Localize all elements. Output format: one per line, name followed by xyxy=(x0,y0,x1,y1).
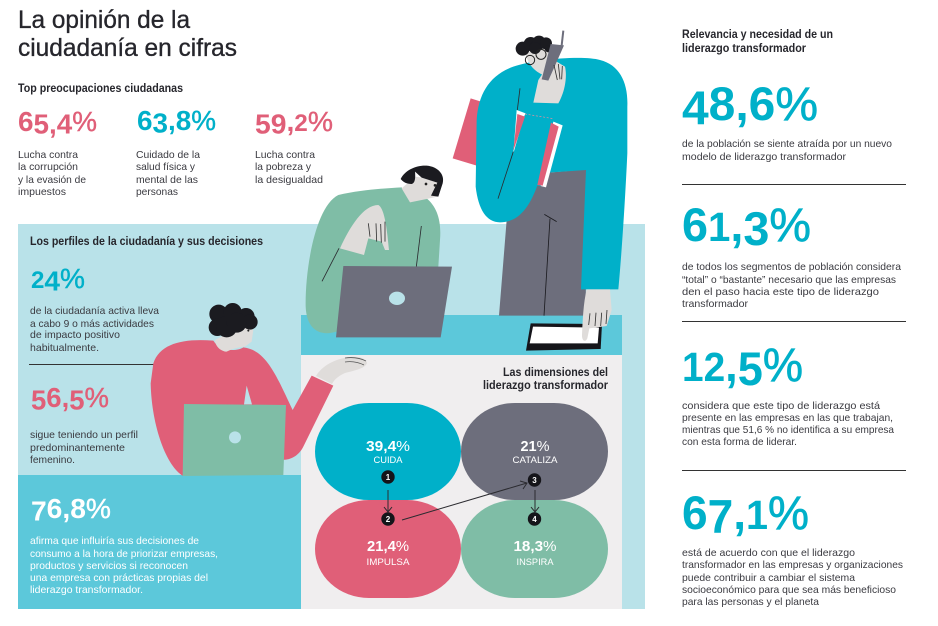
stat: 12,5%: % xyxy=(763,338,803,391)
stat: 24%: de impacto positivo xyxy=(30,329,120,341)
stat: 76,8%: 6,8 xyxy=(47,493,86,524)
stat: 61,3%: transformador xyxy=(682,298,749,310)
stat: 67,1%: está de acuerdo con que el liderazgo xyxy=(682,547,855,559)
stat: 63,8%: % xyxy=(191,105,216,136)
stat: 61,3%: % xyxy=(769,198,811,251)
stat: 65,4%: 6 xyxy=(18,106,34,137)
heading: las dimensiones: liderazgo transformador xyxy=(483,378,608,392)
stat: 76,8%: 7 xyxy=(31,496,47,526)
label: inspira xyxy=(514,538,556,568)
stat: 67,1%: para las personas y el planeta xyxy=(682,596,819,608)
stat: 59,2%: 59 xyxy=(255,108,286,140)
heading: perfiles: Los perfiles de la ciudadanía y sus decisiones xyxy=(30,236,263,248)
stat: 48,6% xyxy=(682,77,892,163)
marker: 1 xyxy=(381,470,395,484)
blob: inspira xyxy=(461,500,608,598)
stat: 48,6%: 4 xyxy=(682,81,709,134)
stat: 76,8% xyxy=(30,493,218,596)
stat: 67,1%: 6 xyxy=(682,486,708,539)
stat: 67,1%: , xyxy=(733,486,746,539)
stat: 63,8% xyxy=(136,105,216,198)
stat: 63,8%: ,8 xyxy=(168,105,191,136)
stat: 76,8%: afirma que influiría sus decisiones de xyxy=(30,535,199,547)
title: La opinión de la xyxy=(18,6,190,34)
stat: 65,4% xyxy=(18,106,97,198)
title xyxy=(18,6,237,62)
stat: 65,4%: impuestos xyxy=(18,186,66,198)
blob: cataliza xyxy=(461,403,608,500)
stat: 56,5%: femenino. xyxy=(30,454,75,466)
heading: las dimensiones: Las dimensiones del xyxy=(503,365,608,379)
stat: 24%: % xyxy=(60,263,85,294)
title: ciudadanía en cifras xyxy=(18,34,237,62)
stat: 59,2%: la desigualdad xyxy=(255,174,323,186)
stat: 56,5%: % xyxy=(85,382,109,413)
stat: 12,5%: considera que este tipo de liderazgo está xyxy=(682,400,880,412)
label: inspira: 18,3% xyxy=(514,538,556,555)
stat: 24%: a cabo 9 o más actividades xyxy=(30,318,154,330)
marker: 3: 3 xyxy=(532,476,537,485)
stat: 24%: habitualmente. xyxy=(30,342,99,354)
stat: 48,6%: modelo de liderazgo transformador xyxy=(682,151,847,163)
stat: 24% xyxy=(30,263,159,354)
label: cataliza: CATALIZA xyxy=(512,455,558,466)
section: los perfiles de la ciudadanía xyxy=(29,236,263,466)
stat: 59,2%: la pobreza y xyxy=(255,161,312,173)
heading: top preocupaciones: Top preocupaciones ciudadanas xyxy=(18,83,183,95)
stat: 76,8%: liderazgo transformador. xyxy=(30,584,143,596)
stat: 24%: 2 xyxy=(31,267,44,294)
heading: relevancia xyxy=(682,29,833,55)
stat: 61,3%: 61, xyxy=(682,198,743,251)
marker: 2 xyxy=(381,512,395,526)
label: cataliza: 21% xyxy=(520,438,550,455)
stat: 56,5%: 5 xyxy=(69,384,85,416)
stat: 59,2%: 2% xyxy=(294,106,333,137)
stat: 24%: 4 xyxy=(44,266,60,296)
arrow: 3 to 4 xyxy=(531,490,539,512)
stat: 12,5%: mientras que 51,6 % no identifica a su empresa xyxy=(682,424,894,436)
stat: 67,1%: 1% xyxy=(746,486,810,539)
stat: 12,5% xyxy=(682,338,894,448)
stat: 61,3%: 3 xyxy=(743,202,769,255)
label: impulsa xyxy=(366,538,410,568)
stat: 65,4%: Lucha contra xyxy=(18,149,78,161)
heading: relevancia: liderazgo transformador xyxy=(682,43,806,55)
stat: 61,3% xyxy=(682,198,901,310)
label: cataliza xyxy=(512,438,558,466)
marker: 4: 4 xyxy=(532,515,537,524)
stat: 67,1%: transformador en las empresas y organizaciones xyxy=(682,559,903,571)
stat: 48,6%: % xyxy=(775,77,818,130)
arrow: 2 to 3 xyxy=(402,481,527,520)
marker: 1: 1 xyxy=(386,473,391,482)
illustration: woman in pink with laptop xyxy=(151,303,367,476)
stat: 76,8%: % xyxy=(86,493,111,524)
heading: relevancia: Relevancia y necesidad de un xyxy=(682,29,833,41)
stat: 12,5%: presente en las empresas en las que trabajan, xyxy=(682,412,893,424)
stat: 76,8%: una empresa con prácticas propias del xyxy=(30,572,208,584)
stat: 56,5%: 6, xyxy=(46,382,69,413)
stat: 63,8%: 3 xyxy=(152,108,168,138)
stat: 56,5%: sigue teniendo un perfil xyxy=(30,429,138,441)
stat: 63,8%: Cuidado de la xyxy=(136,149,200,161)
stat: 56,5%: predominantemente xyxy=(30,442,125,454)
stat: 67,1% xyxy=(682,486,903,608)
illustration: man on the phone xyxy=(453,31,627,351)
stat: 56,5% xyxy=(30,382,138,466)
stat: 61,3%: de todos los segmentos de población considera xyxy=(682,261,901,273)
stat: 65,4%: la corrupción xyxy=(18,161,78,173)
panel: teal desk xyxy=(301,315,622,355)
illustration: woman with laptop xyxy=(306,166,452,337)
marker: 2: 2 xyxy=(386,515,391,524)
label: cuida: 39,4% xyxy=(366,438,410,455)
stat: 59,2%: , xyxy=(286,106,294,137)
label: impulsa: IMPULSA xyxy=(366,557,410,568)
label: inspira: INSPIRA xyxy=(516,557,554,568)
label: cuida: CUIDA xyxy=(374,455,403,466)
chart: dimensions diagram xyxy=(315,403,608,598)
stat: 76,8%: consumo a la hora de priorizar empresas, xyxy=(30,548,218,560)
blob: impulsa xyxy=(315,500,461,598)
stat: 67,1%: socioeconómico para que sea más beneficioso xyxy=(682,584,896,596)
stat: 56,5%: 5 xyxy=(31,384,46,416)
stat: 63,8%: personas xyxy=(136,186,178,198)
stat: 67,1%: 7 xyxy=(708,490,733,543)
stat: 65,4%: % xyxy=(72,106,97,137)
stat: 12,5%: con esta forma de liderar. xyxy=(682,436,797,448)
stat: 76,8%: productos y servicios si reconocen xyxy=(30,560,188,572)
marker: 4 xyxy=(528,512,541,526)
heading: las dimensiones xyxy=(483,365,608,392)
label: impulsa: 21,4% xyxy=(367,538,409,555)
stat: 67,1%: puede contribuir a cambiar el sistema xyxy=(682,572,855,584)
panel: teal bottom left xyxy=(18,475,301,609)
stat: 63,8%: 6 xyxy=(137,105,153,136)
stat: 63,8%: salud física y xyxy=(136,161,196,173)
stat: 61,3%: den el paso hacia este tipo de liderazgo xyxy=(682,286,879,298)
column: relevancia y necesidad xyxy=(682,29,906,608)
label: cuida xyxy=(366,438,410,466)
stat: 12,5%: 12, xyxy=(682,338,738,391)
stat: 61,3%: “total” o “bastante” necesario que las empresas xyxy=(682,274,896,286)
stat: 63,8%: mental de las xyxy=(136,174,198,186)
marker: 3 xyxy=(528,473,541,487)
section: top preocupaciones ciudadanas xyxy=(18,83,333,198)
stat: 59,2% xyxy=(255,106,333,186)
panel: background light blue xyxy=(18,224,645,609)
panel: dimensions grey xyxy=(301,355,622,609)
stat: 12,5%: 5 xyxy=(738,342,763,395)
stat: 48,6%: de la población se siente atraída por un nuevo xyxy=(682,138,892,150)
stat: 59,2%: Lucha contra xyxy=(255,149,315,161)
stat: 65,4%: y la evasión de xyxy=(18,174,86,186)
stat: 48,6%: 8,6 xyxy=(709,77,775,130)
stat: 24%: de la ciudadanía activa lleva xyxy=(30,305,159,317)
arrow: 1 to 2 xyxy=(384,490,392,512)
blob: cuida xyxy=(315,403,461,500)
stat: 65,4%: 5,4 xyxy=(33,108,73,140)
